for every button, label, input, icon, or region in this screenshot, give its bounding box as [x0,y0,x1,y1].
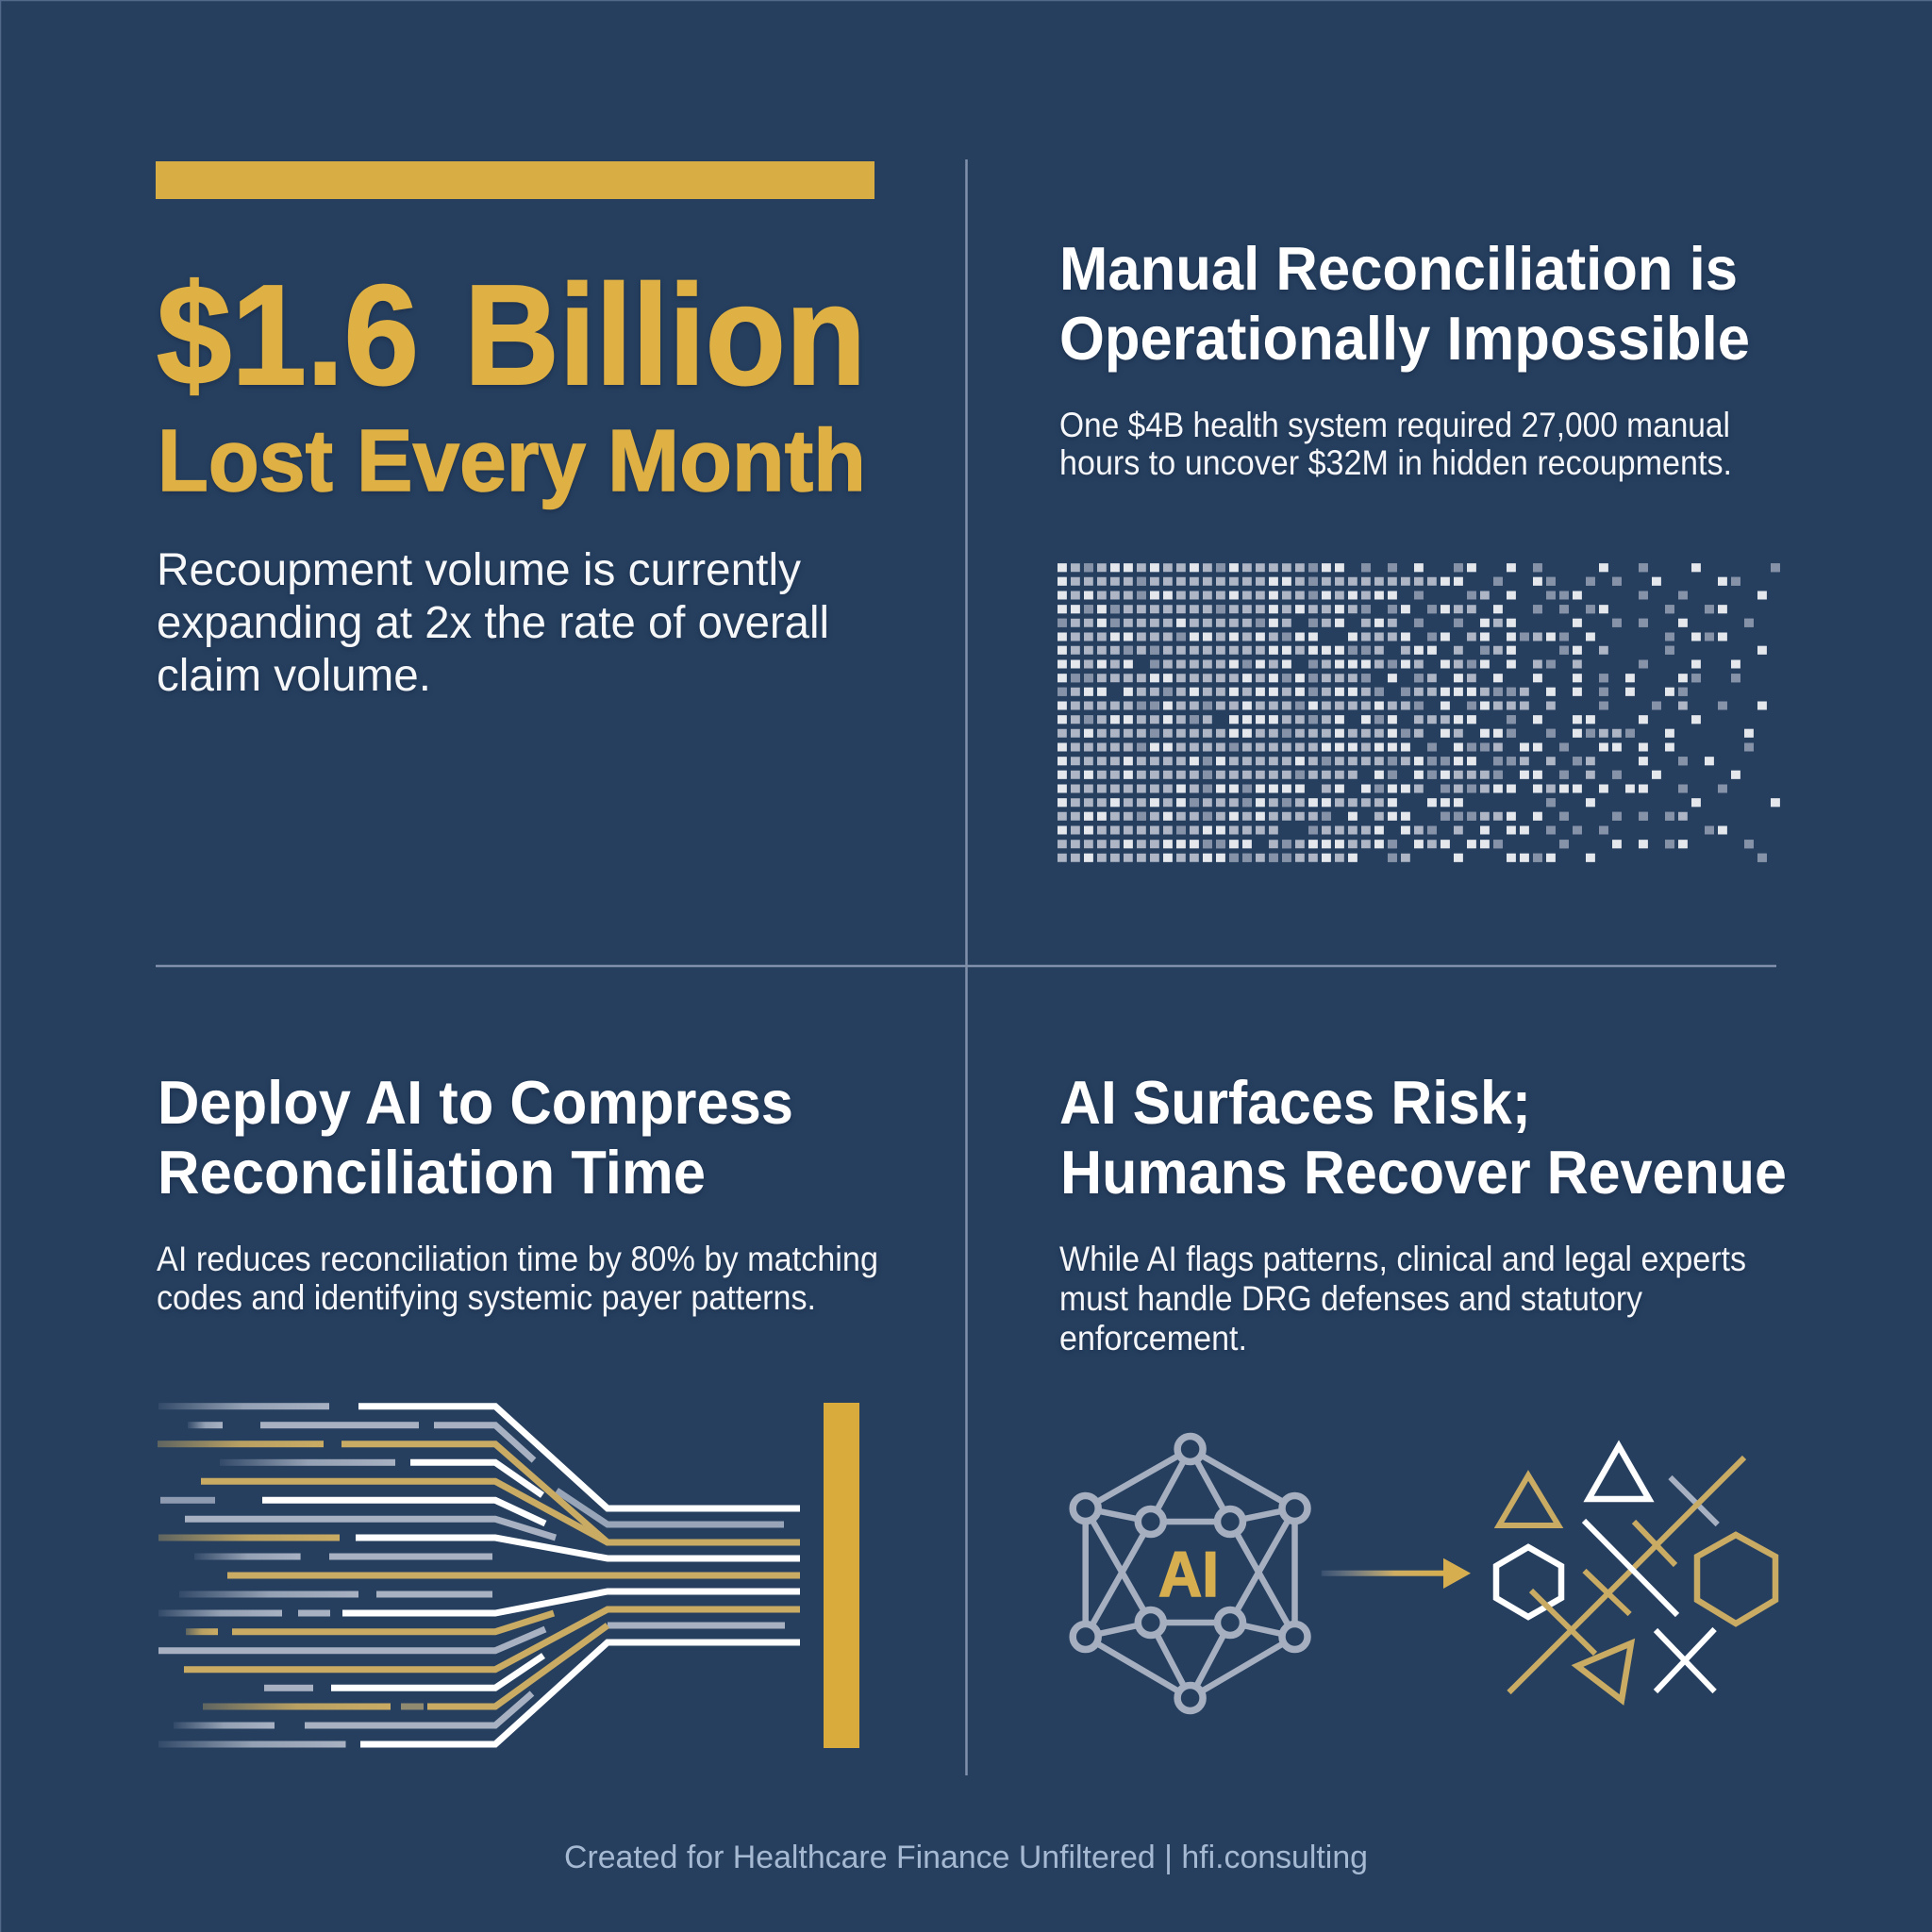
icon: AI network hexagon [1073,1436,1307,1711]
gold accent bar [156,161,874,199]
body text: manual hours [1059,406,1732,482]
heading: manual reconciliation: Manual Reconciliation is [1059,234,1738,303]
headline: $1.6 Billion: Billion [464,255,866,414]
body text: recoupment volume: claim volume. [157,651,431,701]
body text: experts: While AI flags patterns, clinical and legal experts [1059,1240,1746,1278]
panel: deploy AI [157,1068,878,1748]
subheadline: Lost Every Month [158,411,866,509]
heading: AI surfaces risk [1059,1068,1787,1207]
body text: experts [1059,1240,1746,1357]
body text: AI reduces time: codes and identifying systemic payer patterns. [157,1278,816,1317]
body text: recoupment volume [157,545,829,701]
faded source segments [158,1403,492,1747]
heading: manual reconciliation: Operationally Impossible [1059,304,1750,373]
heading: deploy AI: Reconciliation Time [158,1138,706,1207]
body text: experts: enforcement. [1059,1319,1247,1357]
body text: manual hours: One $4B health system required 27,000 manual [1059,406,1730,444]
heading: AI surfaces risk: Humans Recover Revenue [1060,1138,1787,1207]
footer credit: Created for Healthcare Finance Unfiltered | hfi.consulting [564,1840,1368,1875]
panel: headline statistic [156,161,874,701]
body text: manual hours: hours to uncover $32M in hidden recoupments. [1059,443,1732,482]
subheadline: Lost Every Month: Every [357,411,586,509]
gold target bar [824,1403,859,1748]
heading: AI surfaces risk: AI Surfaces Risk; [1059,1068,1531,1137]
heading: manual reconciliation [1059,234,1750,373]
body text: AI reduces time: AI reduces reconciliation time by 80% by matching [157,1240,878,1278]
body text: experts: must handle DRG defenses and statutory [1059,1279,1642,1318]
chart: dissolving grid of data squares [1058,568,1784,858]
panel: manual reconciliation [1058,234,1784,858]
icon: scattered risk shapes [1496,1446,1775,1700]
arrow: AI to risk patterns [1322,1558,1471,1589]
white stream lines [262,1407,800,1744]
body text: recoupment volume: expanding at 2x the rate of overall [157,598,829,648]
panel: AI surfaces risk [1059,1068,1787,1711]
headline: $1.6 Billion [157,255,866,414]
icon label: AI: AI [1158,1539,1219,1610]
subheadline: Lost Every Month: Lost [158,411,333,509]
heading: deploy AI: Deploy AI to Compress [158,1068,793,1137]
body text: recoupment volume: Recoupment volume is currently [157,545,801,595]
subheadline: Lost Every Month: Month [608,411,866,509]
gold stream lines [184,1444,800,1707]
heading: deploy AI [158,1068,793,1207]
diagram: data streams converging [158,1403,859,1748]
body text: AI reduces time [157,1240,878,1317]
headline: $1.6 Billion: $1.6 [157,255,419,414]
grey stream lines [158,1425,785,1725]
